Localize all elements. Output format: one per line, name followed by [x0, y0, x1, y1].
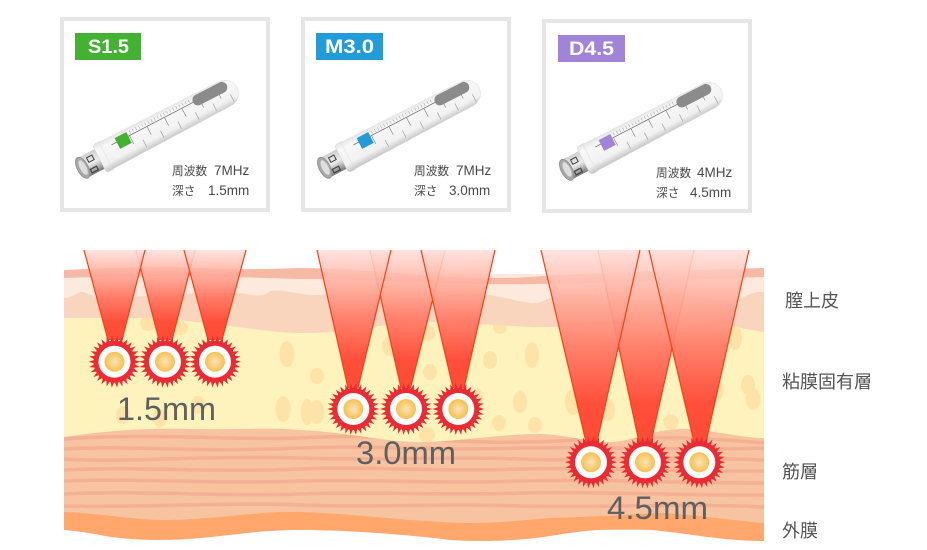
- spec text: D4.5: 4MHz: [697, 165, 733, 180]
- muscle fibres: [64, 436, 764, 507]
- badge: D4.5: D4.5: [569, 39, 614, 60]
- panel: M3.0 probe: [303, 19, 509, 210]
- icon: S1.5 probe handpiece: [71, 74, 244, 184]
- spec text: M3.0: [414, 163, 492, 198]
- layer: epithelium lower: [64, 285, 764, 333]
- spec text: M3.0: 深さ: [414, 184, 437, 198]
- badge: M3.0: [316, 33, 383, 60]
- spec text: D4.5: 深さ: [656, 186, 679, 200]
- badge: D4.5: [558, 35, 625, 62]
- badge: M3.0: M3.0: [325, 37, 374, 58]
- icon: M3.0 probe handpiece: [313, 74, 486, 184]
- spec text: S1.5: 周波数: [172, 164, 207, 178]
- spec text: D4.5: 周波数: [656, 166, 691, 180]
- layer label: adventitia: 外膜: [782, 521, 818, 541]
- spec text: S1.5: 7MHz: [214, 163, 250, 178]
- spec text: S1.5: 1.5mm: [208, 183, 249, 198]
- depth label: 4.5mm: 4.5mm: [607, 490, 708, 526]
- badge: S1.5: [75, 33, 141, 60]
- layer: fascia: [64, 512, 764, 541]
- ultrasound beams: 3.0mm: [317, 250, 495, 388]
- layer label: muscle: 筋層: [782, 462, 818, 482]
- focal points: 1.5mm: [88, 336, 241, 388]
- depth label: 1.5mm: 1.5mm: [117, 391, 216, 427]
- depth label: 3.0mm: 3.0mm: [356, 435, 456, 471]
- panel: D4.5 probe: [544, 21, 750, 211]
- ultrasound beams: 4.5mm: [541, 250, 749, 442]
- spec text: S1.5: [172, 163, 250, 198]
- icon: D4.5 probe handpiece: [555, 76, 728, 186]
- spec text: D4.5: [656, 165, 733, 200]
- layer label: epithelium: 膣上皮: [785, 291, 839, 311]
- panel: S1.5 probe: [62, 19, 268, 210]
- skin cross-section diagram: [64, 267, 764, 541]
- fat cell ovals: [116, 315, 760, 443]
- badge: S1.5: S1.5: [88, 37, 129, 58]
- focal points: 4.5mm: [565, 436, 725, 488]
- focal points: 3.0mm: [327, 383, 484, 435]
- spec text: D4.5: 4.5mm: [690, 185, 731, 200]
- spec text: M3.0: 3.0mm: [449, 183, 490, 198]
- layer: lamina propria: [64, 300, 764, 445]
- spec text: M3.0: 周波数: [414, 164, 449, 178]
- layer: surface band: [64, 267, 764, 284]
- ultrasound beams: 1.5mm: [84, 250, 246, 340]
- layer label: lamina propria: 粘膜固有層: [782, 372, 872, 392]
- layer: epithelium upper: [64, 274, 764, 303]
- spec text: M3.0: 7MHz: [456, 163, 492, 178]
- spec text: S1.5: 深さ: [172, 184, 195, 198]
- layer: muscle: [64, 429, 764, 530]
